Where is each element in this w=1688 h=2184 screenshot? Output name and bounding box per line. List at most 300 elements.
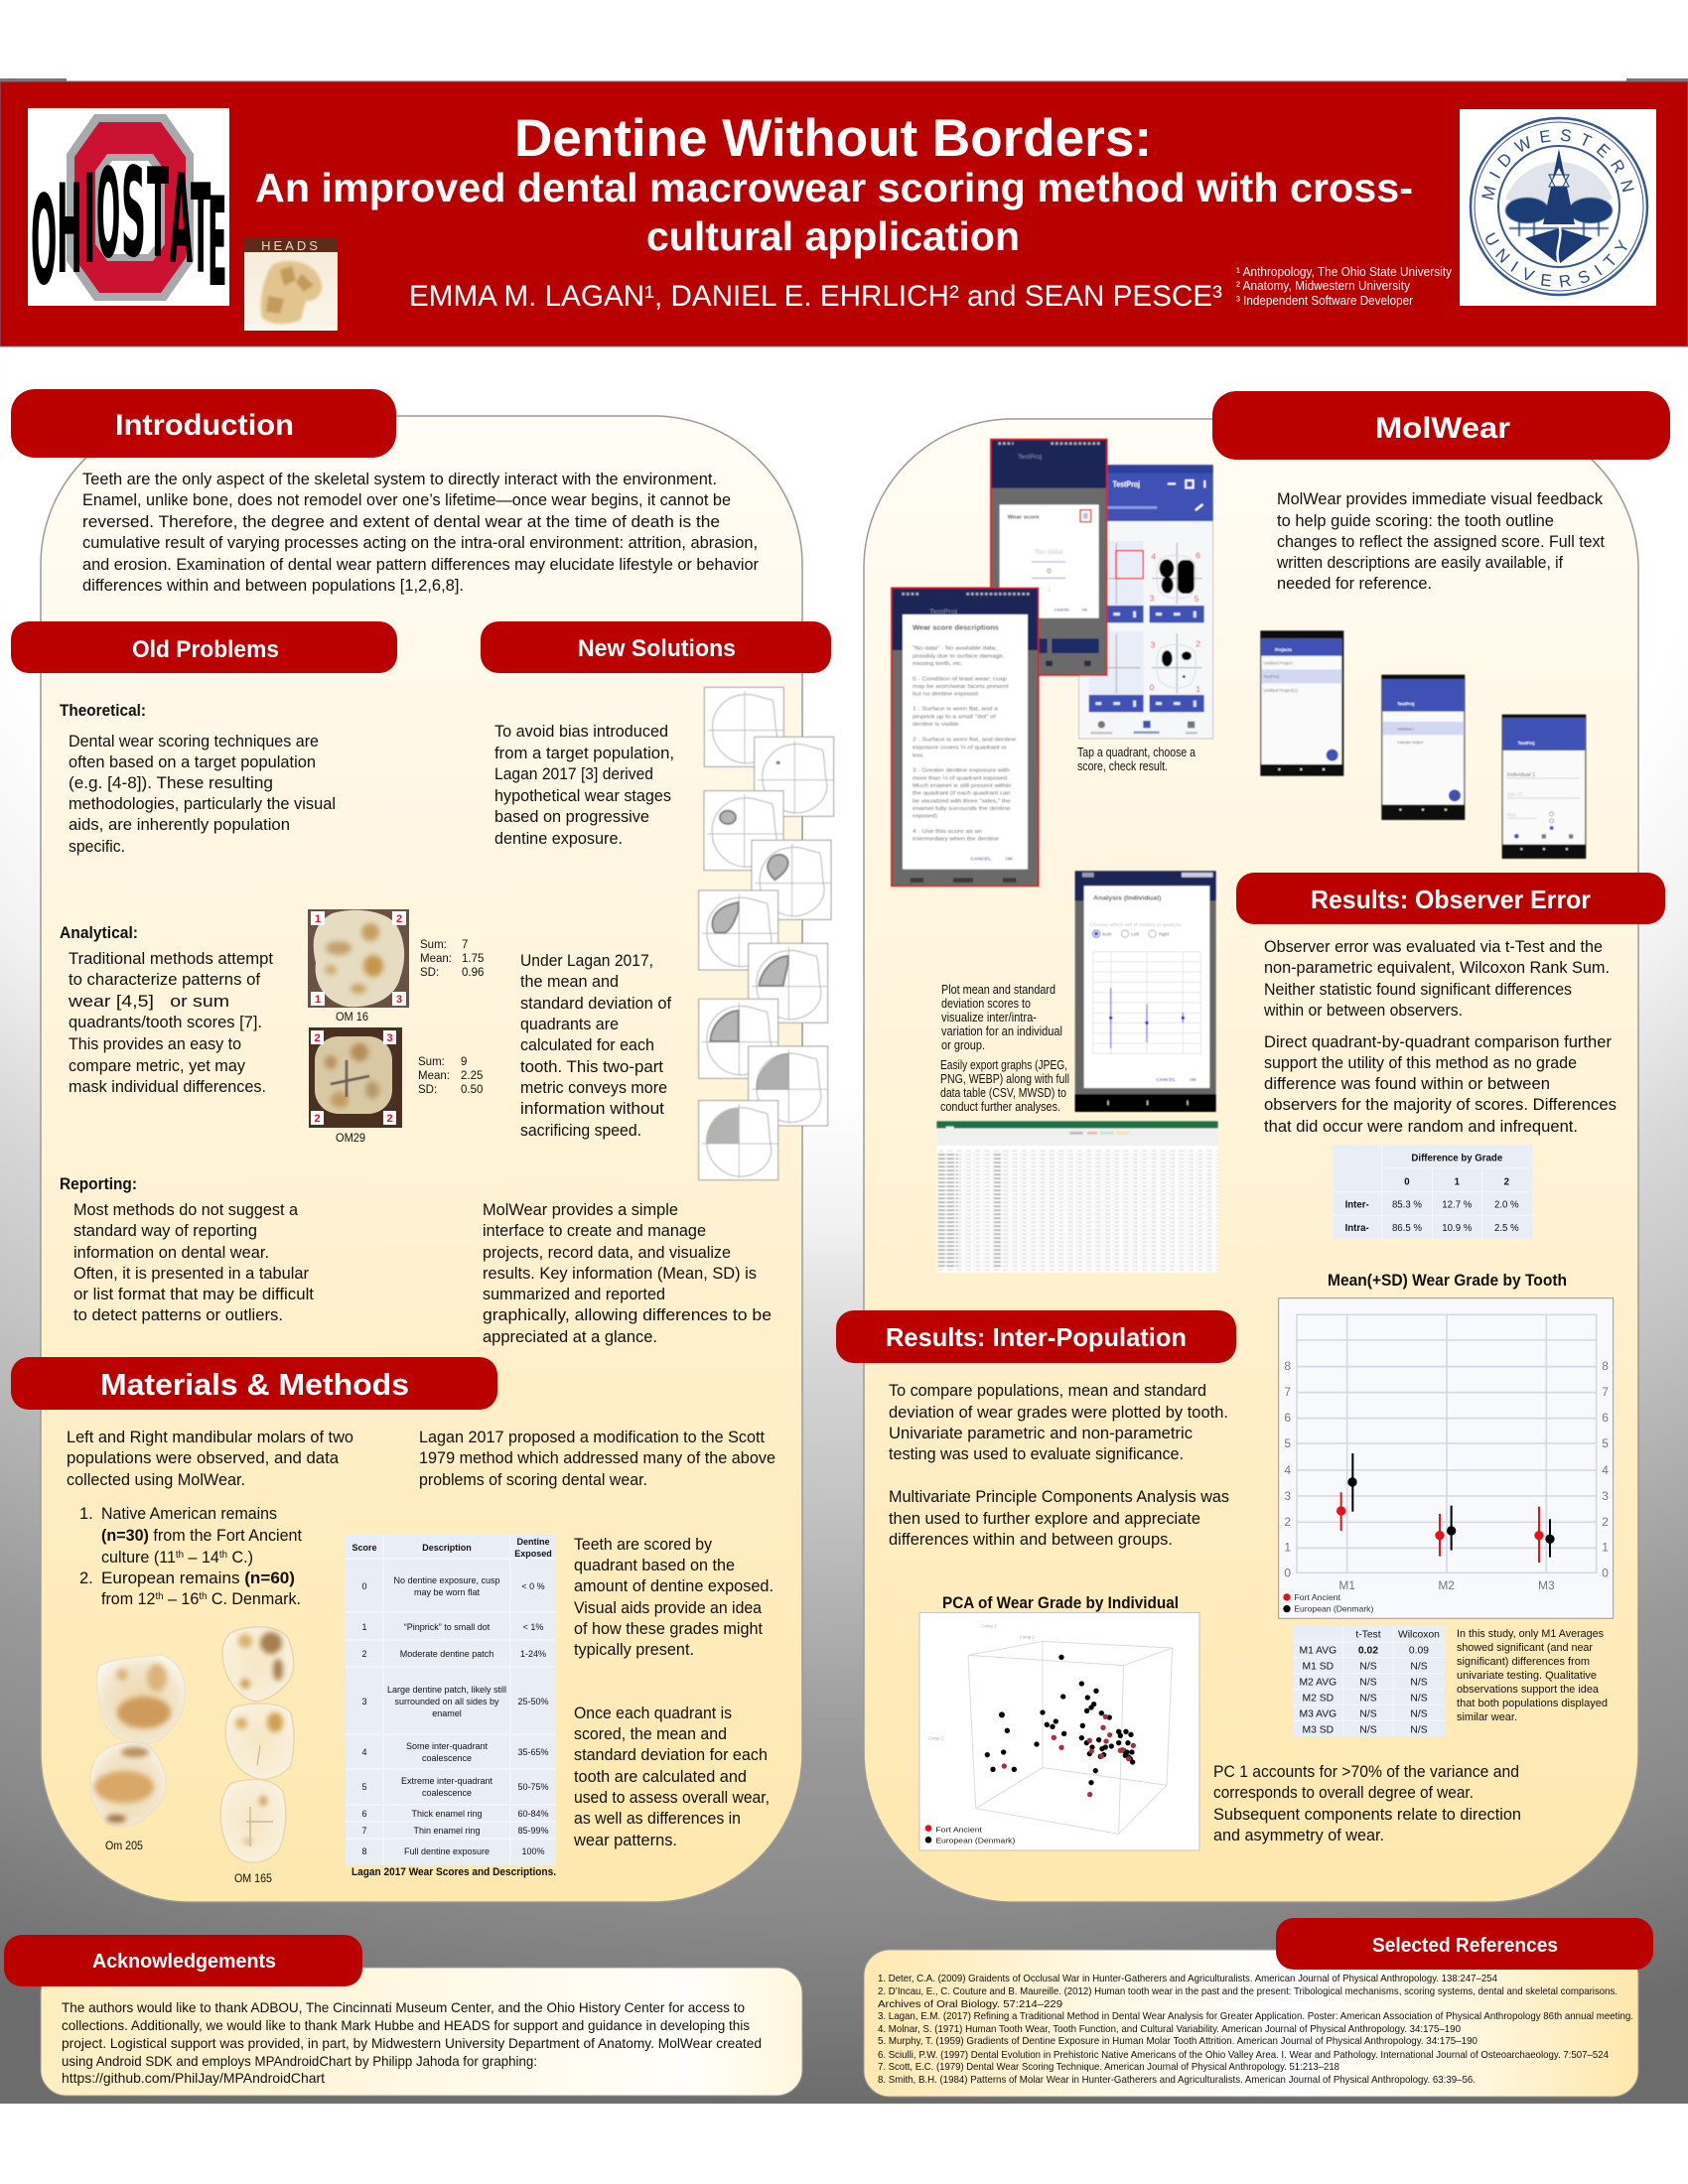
chart: PCA 3D scatter: Comp 2: [928, 1736, 944, 1741]
text: compare populations: deviation of wear grades were plotted by tooth.: [889, 1404, 1228, 1422]
table: wear scores and descriptions: Description: [422, 1543, 472, 1553]
panel: acknowledgements: [41, 1968, 802, 2096]
chart legend: Fort Ancient: [1294, 1592, 1341, 1602]
text: MolWear simple interface: interface to create and manage: [483, 1222, 706, 1240]
text: bias avoidance: dentine exposure.: [494, 830, 623, 848]
text: M1 significance note: significant) differences from: [1457, 1656, 1590, 1668]
tooth photo: OM 16: [308, 909, 409, 1008]
phone: wear score descriptions: but no dentine exposed.: [913, 692, 980, 698]
text: teeth are scored: [574, 1536, 774, 1659]
chart: mean wear grade by tooth: 0: [1602, 1567, 1609, 1580]
subtitle: [255, 165, 1413, 259]
chart: mean wear grade by tooth: 3: [1602, 1489, 1609, 1503]
text: Lagan 2017 modification: problems of scoring dental wear.: [419, 1471, 647, 1489]
table: wear scores and descriptions: Large dentine patch, likely still: [387, 1685, 506, 1695]
text: teeth are scored: Visual aids provide an idea: [574, 1599, 763, 1617]
table: significance tests: N/S: [1410, 1662, 1428, 1673]
table: wear scores and descriptions: coalescence: [422, 1753, 472, 1763]
phone: molar data screen: TestProj: [1113, 479, 1140, 488]
text: MolWear simple interface: [483, 1201, 772, 1346]
text: MolWear simple interface: results. Key information (Mean, SD) is: [483, 1265, 757, 1283]
phone: wear score descriptions: 2 - Surface is worn flat, and dentine: [913, 737, 1016, 743]
chart: mean wear grade by tooth: 6: [1602, 1411, 1609, 1425]
text: teeth are scored: typically present.: [574, 1641, 694, 1659]
numbered list: samples: – 14: [184, 1549, 219, 1567]
heading: Old Problems: [11, 621, 397, 673]
text: materials left: populations were observed, and data: [67, 1449, 340, 1467]
text: references list: 6. Sciulli, P.W. (1997) Dental Evolution in Prehistoric Native Americans of the Ohio Valley Area. I. Wear and Pathology. International Journal of Osteoarchaeology. 7:507–524: [878, 2049, 1609, 2061]
table: significance tests: M1 AVG: [1299, 1646, 1336, 1657]
phone: analysis chart: [1075, 871, 1216, 1112]
caption: plot mean: [941, 983, 1062, 1052]
text: acknowledgements: collections. Additionally, we would like to thank Mark Hubbe and HEADS for support and guidance in developing this: [62, 2017, 750, 2033]
caption: tap a quadrant: score, check result.: [1077, 759, 1168, 773]
chart title: PCA: PCA of Wear Grade by Individual: [942, 1594, 1179, 1612]
tooth photo: OM29: [309, 1027, 402, 1128]
phone: molar data screen: 2: [1196, 638, 1200, 648]
text: references list: 1. Deter, C.A. (2009) Graidents of Occlusal War in Hunter-Gatherers and Agriculturalists. American Journal of Physical Anthropology. 138:247–254: [878, 1973, 1497, 1984]
table: difference by grade: Inter-: [1345, 1200, 1369, 1211]
text: Theoretical: often based on a target population: [69, 753, 316, 771]
text: references list: 5. Murphy, T. (1959) Gradients of Dentine Exposure in Human Molar Tooth Attrition. American Journal of Physical Anthropology. 34:175–190: [878, 2035, 1477, 2047]
table: wear scores and descriptions: Thin enamel ring: [413, 1826, 481, 1836]
numbered list: samples: C.): [227, 1549, 253, 1567]
text: Analytical: wear [4,5] or sum: [68, 993, 229, 1011]
phone: individual form: [1502, 715, 1586, 859]
text: once each quadrant: used to assess overall wear,: [574, 1789, 770, 1807]
chart: mean wear grade by tooth: 8: [1602, 1359, 1609, 1373]
table: wear scores and descriptions: Some inter-quadrant: [406, 1741, 489, 1751]
phone: projects list: Untitled Project: [1263, 660, 1293, 665]
phone: wear score descriptions: 0 - Condition of least wear; cusp: [913, 676, 1007, 682]
phone: molar data screen: 3: [1151, 639, 1156, 649]
table: wear scores and descriptions: 50-75%: [517, 1782, 549, 1792]
table: wear scores and descriptions: surrounded on all sides by: [394, 1697, 499, 1706]
table: wear scores and descriptions: enamel: [432, 1708, 462, 1718]
stats: OM 16: 1.75: [462, 953, 484, 965]
phone: wear score picker: 0: [1047, 567, 1051, 576]
text: once each quadrant: [573, 1705, 770, 1849]
text: references list: 7. Scott, E.C. (1979) Dental Wear Scoring Technique. American Journal of Physical Anthropology. 51:213–218: [878, 2061, 1339, 2073]
table: wear scores and descriptions: No dentine exposure, cusp: [393, 1575, 500, 1585]
phone: wear score descriptions: intermediary when the dentine: [913, 837, 999, 843]
text: Under Lagan 2017: sacrificing speed.: [520, 1122, 641, 1140]
logo: Ohio State: T: [147, 143, 169, 286]
text: once each quadrant: standard deviation for each: [574, 1746, 768, 1764]
table: difference by grade: 2: [1504, 1176, 1509, 1187]
text: acknowledgements: https://github.com/PhilJay/MPAndroidChart: [62, 2070, 325, 2086]
text: Theoretical: aids, are inherently population: [69, 816, 290, 834]
text: teeth are scored: Teeth are scored by: [574, 1536, 713, 1554]
table: significance tests: M1 SD: [1303, 1662, 1334, 1673]
table: wear scores and descriptions: < 1%: [523, 1622, 543, 1632]
phone: wear score descriptions: be visualized with three "sides," the: [913, 798, 1011, 804]
phone: molar data screen: 1: [1196, 684, 1200, 694]
text: references list: 3. Lagan, E.M. (2017) Refining a Traditional Method in Dental Wear Analysis for Greater Application. Poster: American Association of Physical Anthropology 86th annual meeting.: [878, 2010, 1633, 2022]
text: observer error stats: Observer error was evaluated via t-Test and the: [1264, 938, 1603, 956]
authors: EMMA M. LAGAN¹, DANIEL E. EHRLICH² and SEAN PESCE³: [409, 280, 1222, 313]
phone: molar data screen: 0: [1150, 683, 1155, 693]
text: Reporting: information on dental wear.: [73, 1244, 269, 1262]
text: compare populations: testing was used to evaluate significance.: [889, 1445, 1184, 1463]
screenshot: exported spreadsheet: [936, 1121, 1218, 1273]
phone: wear score descriptions: Wear score descriptions: [913, 624, 999, 631]
text: Lagan 2017 modification: [419, 1429, 775, 1489]
phone: wear score descriptions: 3 - Greater dentine exposure with: [913, 768, 1010, 774]
text: quadrant comparison: Direct quadrant-by-quadrant comparison further: [1264, 1033, 1612, 1051]
intro text: reversed. Therefore, the degree and extent of dental wear at the time of death is the: [82, 513, 720, 531]
caption: tap a quadrant: Tap a quadrant, choose a: [1077, 746, 1196, 759]
phone: analysis chart: Both: [1102, 932, 1112, 937]
numbered list: samples: 1.: [79, 1505, 93, 1523]
table: significance tests: N/S: [1359, 1724, 1377, 1735]
phone: analysis chart: CANCEL: [1156, 1077, 1176, 1082]
logo: Ohio State: T: [191, 159, 211, 302]
text: Under Lagan 2017: the mean and: [520, 973, 619, 991]
heading: Selected References: Selected References: [1372, 1935, 1558, 1957]
phone: analysis chart: Left: [1131, 932, 1140, 937]
text: MolWear simple interface: MolWear provides a simple: [483, 1201, 678, 1219]
caption: Om 205: Om 205: [105, 1839, 143, 1852]
caption: export graphs: data table (CSV, MWSD) to: [940, 1086, 1066, 1100]
text: Reporting: Reporting:: [60, 1175, 137, 1193]
chart: mean wear grade by tooth: 4: [1284, 1463, 1291, 1477]
text: materials left: collected using MolWear.: [67, 1471, 245, 1489]
text: MolWear feedback: to help guide scoring: the tooth outline: [1277, 512, 1554, 530]
tooth photo: OM 16: 1: [315, 913, 321, 925]
caption: export graphs: [940, 1058, 1069, 1114]
logo: Ohio State: E: [208, 172, 226, 315]
table: significance tests: N/S: [1410, 1693, 1428, 1704]
text: Reporting: standard way of reporting: [73, 1222, 257, 1240]
table: difference by grade: [1333, 1145, 1532, 1238]
text: multivariate PCA: differences within and between groups.: [889, 1531, 1173, 1549]
table: difference by grade: Difference by Grade: [1411, 1153, 1503, 1163]
text: Under Lagan 2017: quadrants are: [520, 1016, 619, 1033]
stats: OM 16: 0.96: [462, 967, 484, 979]
chart: PCA 3D scatter: Comp 1: [1020, 1634, 1035, 1639]
text: Analytical: This provides an easy to: [69, 1035, 241, 1053]
text: bias avoidance: from a target population,: [494, 745, 674, 762]
intro text: Teeth are the only aspect of the skeletal system to directly interact with the environment.: [82, 471, 717, 488]
table: difference by grade: 1: [1455, 1176, 1461, 1187]
text: MolWear feedback: needed for reference.: [1277, 575, 1432, 593]
app screenshots: project list phones: [1260, 630, 1586, 859]
heading: New Solutions: New Solutions: [578, 635, 736, 662]
phone: wear score picker: TestProj: [1018, 454, 1042, 461]
phone: molar data screen: 4: [1151, 551, 1156, 561]
text: M1 significance note: similar wear.: [1457, 1711, 1517, 1723]
phone: projects list: TestProj: [1263, 674, 1279, 679]
phone: individual form: Age: [1507, 813, 1516, 819]
chart: mean wear grade by tooth: 5: [1284, 1436, 1291, 1450]
text: Reporting: Often, it is presented in a tabular: [73, 1265, 310, 1283]
stats: OM29: Sum:: [418, 1056, 445, 1068]
text: M1 significance note: that both populations displayed: [1457, 1698, 1608, 1709]
text: compare populations: Univariate parametric and non-parametric: [889, 1425, 1193, 1442]
text: PC 1 interpretation: Subsequent components relate to direction: [1213, 1806, 1521, 1824]
PCA legend: [925, 1825, 1016, 1845]
text: acknowledgements: using Android SDK and employs MPAndroidChart by Philipp Jahoda for graphing:: [62, 2053, 537, 2069]
text: MolWear simple interface: appreciated at a glance.: [483, 1328, 657, 1346]
table: wear scores and descriptions: Exposed: [514, 1549, 552, 1559]
text: Theoretical: Theoretical:: [60, 702, 146, 720]
table: wear scores and descriptions: “Pinprick” to small dot: [404, 1622, 491, 1632]
text: Analytical: quadrants/tooth scores [7].: [69, 1014, 262, 1031]
heading: Introduction: [11, 389, 396, 458]
chart: mean wear grade by tooth: 8: [1284, 1359, 1291, 1373]
caption: plot mean: or group.: [941, 1038, 985, 1052]
text: Reporting: Most methods do not suggest a: [73, 1201, 299, 1219]
heading: Acknowledgements: Acknowledgements: [92, 1951, 276, 1973]
heading: Materials & Methods: [11, 1357, 497, 1410]
chart: mean wear grade by tooth: 7: [1602, 1385, 1609, 1399]
text: teeth are scored: of how these grades might: [574, 1620, 763, 1638]
logo: Ohio State: I: [83, 150, 95, 292]
phone: individuals list: [1381, 675, 1465, 820]
text: observer error stats: within or between observers.: [1263, 1002, 1463, 1020]
table: wear scores and descriptions: 7: [361, 1826, 367, 1836]
numbered list: samples: European remains (n=60): [101, 1570, 295, 1587]
text: Under Lagan 2017: tooth. This two-part: [520, 1058, 663, 1076]
phone: wear score descriptions: CANCEL: [970, 857, 991, 863]
text: quadrant comparison: support the utility of this method as no grade: [1264, 1054, 1577, 1072]
logo: Ohio State: [28, 108, 229, 315]
stats: OM 16: [420, 939, 484, 979]
text: acknowledgements: project. Logistical support was provided, in part, by Midwestern University Department of Anatomy. MolWear created: [62, 2035, 762, 2051]
caption: plot mean: variation for an individual: [941, 1024, 1062, 1038]
phone: projects list: Projects: [1275, 647, 1293, 652]
text: bias avoidance: Lagan 2017 [3] derived: [494, 765, 653, 783]
header banner: [0, 81, 1688, 347]
panel: left main: [41, 416, 802, 1902]
caption: OM29: OM29: [336, 1131, 365, 1145]
numbered list: samples: Native American remains: [101, 1505, 277, 1523]
table: wear scores and descriptions: Thick enamel ring: [411, 1809, 483, 1819]
chart: mean wear grade by tooth: 2: [1602, 1515, 1609, 1529]
text: Analytical: to characterize patterns of: [69, 971, 260, 989]
text: teeth are scored: quadrant based on the: [574, 1557, 735, 1574]
table: significance tests: Wilcoxon: [1398, 1630, 1440, 1641]
text: Analytical: mask individual differences.: [69, 1078, 266, 1096]
subtitle: cultural application: [646, 213, 1020, 259]
text: quadrant comparison: observers for the majority of scores. Differences: [1264, 1096, 1617, 1114]
text: MolWear feedback: written descriptions are easily available, if: [1276, 554, 1563, 572]
chart: mean wear grade by tooth: M3: [1538, 1578, 1555, 1592]
text: Theoretical: specific.: [69, 838, 125, 856]
table: significance tests: M3 AVG: [1299, 1708, 1336, 1719]
tooth photo: OM29: 2: [314, 1032, 321, 1044]
chart: mean wear grade by tooth: 1: [1602, 1541, 1609, 1555]
text: MolWear feedback: [1276, 490, 1605, 593]
affiliations: [1236, 264, 1452, 308]
chart: mean wear grade by tooth: 5: [1602, 1436, 1609, 1450]
text: Under Lagan 2017: Under Lagan 2017,: [520, 952, 653, 970]
numbered list: samples: th: [219, 1550, 227, 1561]
phone: analysis chart: OK: [1190, 1077, 1197, 1082]
phone: wear score descriptions: enamel fully surrounds the dentine: [913, 806, 1011, 812]
stats: OM 16: SD:: [420, 967, 439, 979]
stats: OM 16: Mean:: [420, 953, 452, 965]
phone: wear score descriptions: less.: [913, 752, 924, 758]
caption: OM 165: OM 165: [234, 1871, 272, 1885]
stats: OM29: Mean:: [418, 1070, 450, 1082]
stats: OM29: 9: [461, 1056, 467, 1068]
text: Analytical: [60, 924, 273, 1096]
intro text: differences within and between populations [1,2,6,8].: [82, 577, 464, 595]
numbered list: samples: C. Denmark.: [207, 1590, 301, 1608]
text: once each quadrant: as well as differences in: [574, 1810, 741, 1828]
heading: Selected References: [1276, 1918, 1653, 1970]
table: wear scores and descriptions: < 0 %: [521, 1581, 545, 1591]
title: Dentine Without Borders:: [514, 109, 1152, 168]
phone: wear score descriptions: the quadrant (if each quadrant can: [913, 791, 1010, 797]
logo: HEADS skull: [244, 237, 338, 331]
phone: wear score descriptions: 1 - Surface is worn flat, and a: [913, 707, 999, 713]
text: MolWear feedback: MolWear provides immediate visual feedback: [1277, 490, 1604, 508]
chart: mean wear grade by tooth: 3: [1284, 1489, 1291, 1503]
chart: mean wear grade by tooth: M1: [1338, 1578, 1355, 1592]
caption: tap a quadrant: [1077, 746, 1196, 773]
text: Reporting: to detect patterns or outliers.: [73, 1306, 283, 1324]
table: wear scores and descriptions: 3: [361, 1697, 367, 1706]
text: once each quadrant: wear patterns.: [573, 1832, 677, 1849]
text: PC 1 interpretation: PC 1 accounts for >70% of the variance and: [1213, 1763, 1519, 1781]
phone: projects list: [1260, 630, 1343, 776]
affiliations: ² Anatomy, Midwestern University: [1236, 278, 1410, 293]
subtitle: An improved dental macrowear scoring method with cross-: [255, 165, 1413, 210]
stats: OM29: [418, 1056, 483, 1096]
table: difference by grade: Intra-: [1345, 1223, 1369, 1234]
table: wear scores and descriptions: Extreme inter-quadrant: [401, 1776, 493, 1786]
phone: wear score picker: 1: [1048, 588, 1052, 594]
text: M1 significance note: showed significant (and near: [1457, 1642, 1593, 1654]
tooth photo: OM29: 3: [386, 1032, 393, 1044]
app screenshots: scoring phones: [892, 440, 1213, 886]
table: wear scores and descriptions: 1-24%: [520, 1649, 546, 1659]
text: Analytical: Analytical:: [60, 924, 138, 942]
phone: molar data screen: 5: [1195, 594, 1199, 604]
table: significance tests: t-Test: [1355, 1630, 1381, 1641]
text: materials left: [67, 1429, 353, 1489]
tooth photo: OM 16: 2: [396, 913, 402, 925]
text: PC 1 interpretation: corresponds to overall degree of wear.: [1213, 1784, 1474, 1802]
phone: wear score descriptions: may be worn/wear facets present: [913, 684, 1009, 690]
numbered list: samples: [79, 1505, 302, 1608]
text: references list: 4. Molnar, S. (1971) Human Tooth Wear, Tooth Function, and Cultural Variability. American Journal of Physical Anthropology. 34:175–190: [878, 2023, 1461, 2035]
text: Under Lagan 2017: standard deviation of: [520, 995, 671, 1013]
text: Analytical: compare metric, yet may: [69, 1057, 246, 1075]
chart: mean wear grade by tooth: 1: [1284, 1541, 1291, 1555]
text: once each quadrant: scored, the mean and: [574, 1725, 727, 1743]
phone: individual form: Site ID: [1507, 792, 1523, 798]
affiliations: ¹ Anthropology, The Ohio State University: [1236, 264, 1452, 279]
text: Lagan 2017 modification: 1979 method which addressed many of the above: [419, 1449, 775, 1467]
table: significance tests: N/S: [1359, 1693, 1377, 1704]
text: M1 significance note: univariate testing. Qualitative: [1457, 1670, 1597, 1682]
numbered list: samples: culture (11: [101, 1549, 178, 1567]
text: multivariate PCA: [889, 1488, 1229, 1549]
logo: Ohio State: O: [31, 170, 57, 313]
numbered list: samples: (n=30) from the Fort Ancient: [101, 1527, 302, 1545]
phone: individuals list: TestProj: [1397, 702, 1414, 707]
phone: analysis chart: Right: [1159, 932, 1170, 937]
logo: Ohio State: S: [121, 142, 146, 285]
text: Reporting: or list format that may be difficult: [73, 1286, 314, 1303]
text: MolWear simple interface: graphically, allowing differences to be: [483, 1306, 772, 1324]
heading: Results Inter-Population: Results: Inter-Population: [886, 1322, 1187, 1352]
phone: individuals list: Unknown Subject: [1397, 741, 1423, 745]
text: materials left: Left and Right mandibular molars of two: [67, 1429, 353, 1446]
text: compare populations: To compare populations, mean and standard: [889, 1382, 1206, 1400]
phone: individual form: TestProj: [1518, 741, 1535, 746]
text: observer error stats: [1263, 938, 1610, 1020]
caption: plot mean: deviation scores to: [941, 997, 1031, 1011]
text: bias avoidance: To avoid bias introduced: [494, 723, 668, 741]
phone: wear score descriptions: TestProj: [929, 609, 957, 615]
phone: wear score descriptions: "No data" - No available data,: [913, 646, 997, 652]
numbered list: samples: from 12: [101, 1590, 157, 1608]
heading: Materials & Methods: Materials & Methods: [100, 1367, 409, 1402]
text: bias avoidance: hypothetical wear stages: [494, 787, 671, 805]
stats: OM29: 0.50: [461, 1084, 483, 1096]
text: once each quadrant: tooth are calculated and: [574, 1768, 747, 1786]
table: significance tests: [1293, 1625, 1445, 1736]
table: significance tests: M2 SD: [1303, 1693, 1334, 1704]
text: MolWear simple interface: summarized and reported: [483, 1286, 665, 1303]
stats: OM29: 2.25: [461, 1070, 483, 1082]
phone: projects list: Untitled Project(1): [1263, 688, 1299, 693]
text: MolWear feedback: changes to reflect the assigned score. Full text: [1277, 533, 1605, 551]
text: acknowledgements: The authors would like to thank ADBOU, The Cincinnati Museum Center, and the Ohio History Center for access to: [62, 1999, 745, 2015]
phone: wear score descriptions: 4 - Use this score as an: [913, 829, 982, 835]
text: M1 significance note: [1457, 1628, 1608, 1723]
table: wear scores and descriptions: 35-65%: [517, 1747, 549, 1757]
table: wear scores and descriptions: 6: [361, 1809, 367, 1819]
table: difference by grade: 12.7 %: [1442, 1200, 1473, 1211]
tooth photo: OM29: 2: [386, 1113, 393, 1125]
text: Lagan 2017 modification: Lagan 2017 proposed a modification to the Scott: [419, 1429, 765, 1446]
table: wear scores and descriptions: 5: [361, 1782, 367, 1792]
text: bias avoidance: [494, 723, 674, 848]
phone: wear score picker: [991, 440, 1107, 675]
text: Theoretical: [60, 702, 336, 856]
table: significance tests: 0.09: [1409, 1646, 1429, 1657]
table: significance tests: N/S: [1359, 1678, 1377, 1689]
table: significance tests: N/S: [1410, 1708, 1428, 1719]
phone: wear score descriptions: Much enamel is still present within: [913, 783, 1011, 789]
photo: tooth specimens OM 165: [220, 1627, 294, 1862]
intro text: [82, 471, 759, 595]
text: PC 1 interpretation: and asymmetry of wear.: [1213, 1827, 1384, 1844]
table: difference by grade: 86.5 %: [1392, 1223, 1422, 1234]
text: M1 significance note: observations support the idea: [1457, 1684, 1600, 1696]
caption: OM 16: OM 16: [336, 1010, 368, 1024]
logo: Ohio State: O: [96, 143, 120, 286]
text: teeth are scored: amount of dentine exposed.: [574, 1577, 774, 1595]
table: wear scores and descriptions: coalescence: [422, 1788, 472, 1798]
wear stage diagrams 0 to 8: [699, 687, 834, 1180]
heading: Results Observer Error: Results: Observer Error: [1311, 885, 1591, 914]
logo: Ohio State: H: [57, 159, 82, 302]
tooth photo: OM29: 2: [314, 1113, 321, 1125]
numbered list: samples: th: [199, 1591, 207, 1602]
text: observer error stats: Neither statistic found significant differences: [1264, 981, 1572, 999]
table: wear scores and descriptions: Score: [352, 1543, 377, 1553]
text: Under Lagan 2017: metric conveys more: [520, 1079, 667, 1097]
phone: individuals list: Individual 1: [1397, 727, 1414, 731]
table: wear scores and descriptions: [346, 1534, 556, 1865]
